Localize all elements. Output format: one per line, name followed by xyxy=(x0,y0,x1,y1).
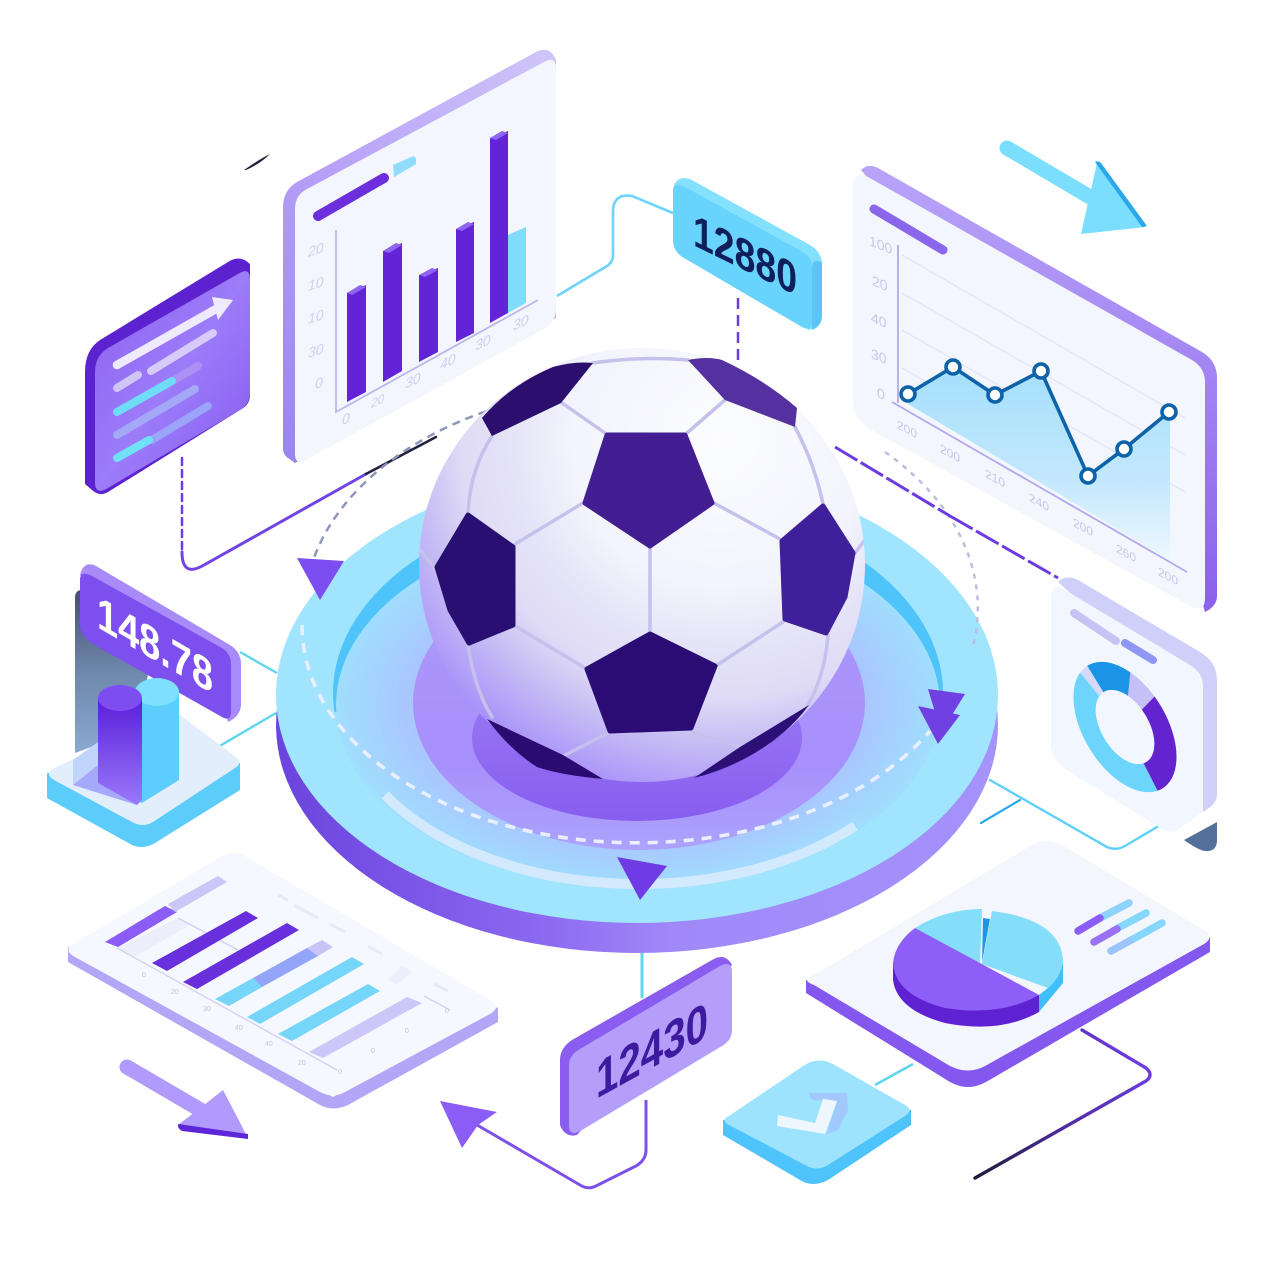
tiny labels: 40 xyxy=(235,1025,243,1032)
arrow: lavender xyxy=(127,1067,248,1139)
purple body xyxy=(98,698,142,805)
pie right side xyxy=(1039,963,1063,1012)
panel: pie chart card xyxy=(806,841,1210,1178)
tiny labels: 0 xyxy=(142,972,146,979)
darker purple disc xyxy=(472,655,802,821)
backdrop panel xyxy=(75,590,150,753)
tile face xyxy=(724,1060,910,1168)
arrow side xyxy=(1095,161,1147,227)
axis labels: 20 xyxy=(872,273,888,295)
patches xyxy=(437,435,853,731)
axis labels: 30 xyxy=(475,332,491,355)
axis labels: 240 xyxy=(1029,490,1049,514)
faded square xyxy=(388,966,413,985)
axis labels: 20 xyxy=(307,240,324,261)
axis labels: 40 xyxy=(871,310,887,332)
pie chart xyxy=(893,909,1063,1027)
faded bar area xyxy=(118,918,190,957)
label: 12880 xyxy=(673,178,822,330)
connectors: platform to donut card xyxy=(981,780,1157,849)
connectors: label 148.78 to platform xyxy=(218,652,277,747)
cyan cylinder xyxy=(135,678,179,803)
panel: horizontal bar card xyxy=(68,853,498,1108)
axis labels: 200 xyxy=(1158,564,1178,588)
card face xyxy=(68,853,496,1096)
seams xyxy=(420,359,865,755)
bottom right crescent xyxy=(694,705,809,778)
axis labels: 0 xyxy=(342,411,350,429)
purple top xyxy=(98,685,142,711)
axis labels xyxy=(307,240,529,429)
axis labels: 260 xyxy=(1116,541,1136,565)
panel: donut chart card xyxy=(1051,577,1217,832)
tiny labels: 40 xyxy=(265,1041,273,1048)
card side xyxy=(68,947,498,1108)
area under line xyxy=(908,367,1170,560)
connector: ball to donut card, dashed xyxy=(835,447,1058,578)
tiny labels: 0 xyxy=(405,1028,409,1035)
panel rim xyxy=(1058,577,1217,812)
purple disc xyxy=(413,556,865,850)
axis labels: 210 xyxy=(985,466,1005,490)
label face xyxy=(673,185,812,329)
ball body xyxy=(419,348,865,782)
text lines xyxy=(117,333,213,458)
label rim xyxy=(673,178,822,330)
platform rim xyxy=(276,497,998,953)
arrow head xyxy=(1081,163,1145,234)
base top xyxy=(49,712,239,825)
decorative connector: small dark tick xyxy=(244,154,270,170)
soccer ball xyxy=(419,348,865,782)
axis labels: 0 xyxy=(315,375,323,393)
axis labels: 200 xyxy=(1073,515,1093,539)
outer inner-disc xyxy=(333,498,943,888)
shadow xyxy=(73,765,137,805)
axes xyxy=(892,245,1187,572)
axis labels: 40 xyxy=(440,351,456,374)
connector: text card to central ball xyxy=(182,437,436,569)
card edge xyxy=(85,258,250,494)
bottom left crescent xyxy=(487,719,603,779)
light arc band xyxy=(385,795,855,884)
icon: bottom triangle arrow xyxy=(617,857,667,900)
top right patch xyxy=(688,358,797,427)
inner disc xyxy=(336,522,940,888)
label side xyxy=(812,261,822,330)
axis labels: 30 xyxy=(405,370,421,393)
arrow: cyan xyxy=(1007,148,1147,234)
connector: bar chart card to 12880 label xyxy=(557,196,673,296)
connector: 12430 label to arrow xyxy=(472,1100,646,1188)
pie purple side xyxy=(893,963,1039,1027)
cyan top xyxy=(135,678,179,706)
title tag xyxy=(393,156,416,177)
bars xyxy=(347,131,526,402)
card side xyxy=(806,937,1210,1087)
axis labels: 200 xyxy=(897,417,917,441)
tiny labels: 0 xyxy=(338,1069,342,1076)
tiny labels: 30 xyxy=(203,1006,211,1013)
icon: cylinders with 148.78 label xyxy=(47,564,241,847)
tiny labels: 20 xyxy=(298,1060,306,1067)
axis labels: 30 xyxy=(308,341,324,362)
panel: bar chart card xyxy=(283,50,556,463)
axis labels: 200 xyxy=(940,441,960,465)
pie purple top xyxy=(893,928,1039,1011)
pie right slice xyxy=(982,911,1063,988)
tiny labels xyxy=(142,972,449,1076)
central platform xyxy=(276,467,998,953)
arrow side xyxy=(178,1124,248,1139)
connector: platform to 12430 label xyxy=(640,953,644,998)
pie sliver xyxy=(982,918,990,962)
axis labels: 30 xyxy=(513,312,529,335)
icon: check tile xyxy=(723,1060,911,1184)
axis labels: 10 xyxy=(308,274,324,295)
arrow shaft xyxy=(127,1067,204,1112)
arrow head xyxy=(178,1090,248,1138)
top left patch xyxy=(482,362,593,436)
arrow up xyxy=(117,297,233,365)
title bar xyxy=(874,209,943,250)
arrow shaft xyxy=(1007,148,1090,197)
orbit: grey dashes xyxy=(310,410,978,650)
card face xyxy=(807,841,1210,1070)
purple cylinder xyxy=(98,685,142,805)
tile side xyxy=(723,1110,911,1184)
axis labels: 30 xyxy=(871,346,887,368)
decorative corner: slate wedge xyxy=(1184,822,1217,851)
pie upper left slice xyxy=(915,909,982,963)
cyan body xyxy=(135,692,179,803)
card face xyxy=(95,271,250,491)
grid lines xyxy=(902,255,1185,522)
axis labels: 10 xyxy=(308,307,324,328)
panel: line chart card xyxy=(853,166,1217,612)
axis labels: 20 xyxy=(370,391,384,411)
arrow head: purple xyxy=(440,1101,497,1148)
chart title bar xyxy=(318,178,384,216)
panel: purple text card xyxy=(85,258,250,494)
axis labels xyxy=(869,233,1178,588)
tiny labels: 0 xyxy=(445,1008,449,1015)
label face xyxy=(569,964,732,1133)
icon: right double arrow xyxy=(918,689,965,744)
panel face xyxy=(853,175,1205,609)
label rim xyxy=(80,564,241,722)
check mark xyxy=(777,1099,837,1134)
label: 12430 xyxy=(560,957,732,1136)
axes xyxy=(336,230,538,412)
panel frame xyxy=(283,50,556,463)
cyan back bar xyxy=(508,227,526,313)
faded gridline marks xyxy=(278,895,448,991)
data line xyxy=(908,367,1169,476)
data points xyxy=(901,360,1176,483)
white dashed orbit xyxy=(302,625,930,843)
axes xyxy=(117,918,450,1070)
platform top xyxy=(276,467,998,923)
connector: label to ball, dashed xyxy=(737,298,739,364)
axis labels: 0 xyxy=(877,385,885,404)
tiny labels: 0 xyxy=(371,1048,375,1055)
value: 148.78 xyxy=(97,585,213,704)
check shadow xyxy=(808,1093,848,1134)
bars xyxy=(105,876,422,1058)
panel rim xyxy=(861,166,1217,612)
tiny labels: 20 xyxy=(171,989,179,996)
panel face xyxy=(295,60,556,462)
axis labels: 100 xyxy=(869,233,892,258)
value: 12880 xyxy=(693,205,797,306)
label rim xyxy=(560,957,732,1136)
label face xyxy=(80,574,231,719)
blue crescent xyxy=(333,557,943,712)
legend lines xyxy=(1078,903,1162,951)
base side xyxy=(47,763,240,847)
panel face xyxy=(1051,587,1203,832)
value: 12430 xyxy=(596,989,708,1110)
connector downward xyxy=(975,1030,1150,1178)
connector to check tile xyxy=(875,1064,913,1085)
donut chart xyxy=(1068,630,1182,824)
icon: left triangle arrow xyxy=(297,558,344,600)
base tint xyxy=(73,742,140,805)
title bars xyxy=(1074,613,1153,660)
